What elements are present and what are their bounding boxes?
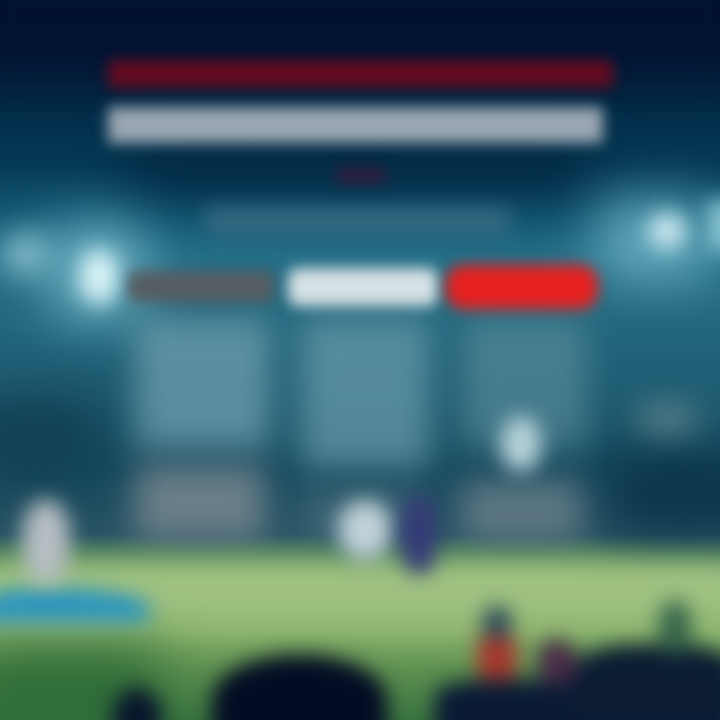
- background: right stand shadow: [610, 460, 720, 530]
- stadium light core: right: [648, 213, 686, 249]
- stadium light: far right distant: [640, 408, 695, 430]
- crowd: centre left group: [212, 655, 387, 720]
- blue mat on pitch: [0, 588, 150, 622]
- crowd: right group: [435, 680, 720, 720]
- player: centre in purple: [402, 496, 436, 574]
- pitch: bright band: [0, 566, 720, 616]
- button: dark grey tab: [128, 271, 274, 302]
- background: left stand shadow: [0, 400, 100, 470]
- stadium light: far left: [5, 236, 47, 272]
- background: dark band behind the subtitle: [130, 145, 590, 190]
- button: red tab: [446, 265, 598, 309]
- crowd: maroon spectator: [538, 640, 576, 684]
- crowd: far left head: [112, 688, 162, 720]
- stadium light core: left: [80, 250, 118, 304]
- panel: middle column lower section: [305, 490, 415, 540]
- panel: left column: [135, 318, 270, 448]
- panel: left column lower section: [135, 465, 265, 540]
- stadium light: left: [55, 230, 140, 315]
- player: centre in white: [338, 500, 392, 560]
- button: white tab: [288, 268, 438, 306]
- crowd: right raised group: [570, 645, 720, 715]
- decorative red mark below the title: [336, 168, 386, 182]
- panel: middle column: [300, 318, 430, 468]
- crowd: spectator in red: [478, 635, 516, 679]
- panel: right column lower section: [462, 480, 582, 542]
- title: white heading line: [108, 107, 603, 143]
- stadium light: right edge: [708, 200, 720, 250]
- panel: right column: [462, 318, 587, 448]
- crowd: far right head: [658, 600, 692, 655]
- stadium light: right glow: [600, 205, 710, 275]
- crowd: spectator head: [482, 606, 512, 640]
- pitch: left dark grass: [0, 650, 160, 720]
- player: left in white: [22, 500, 70, 584]
- title: red heading line: [108, 60, 613, 88]
- stadium light: centre right ball: [500, 416, 542, 472]
- subtitle block: [205, 208, 510, 234]
- background: dark upper stands: [0, 0, 720, 70]
